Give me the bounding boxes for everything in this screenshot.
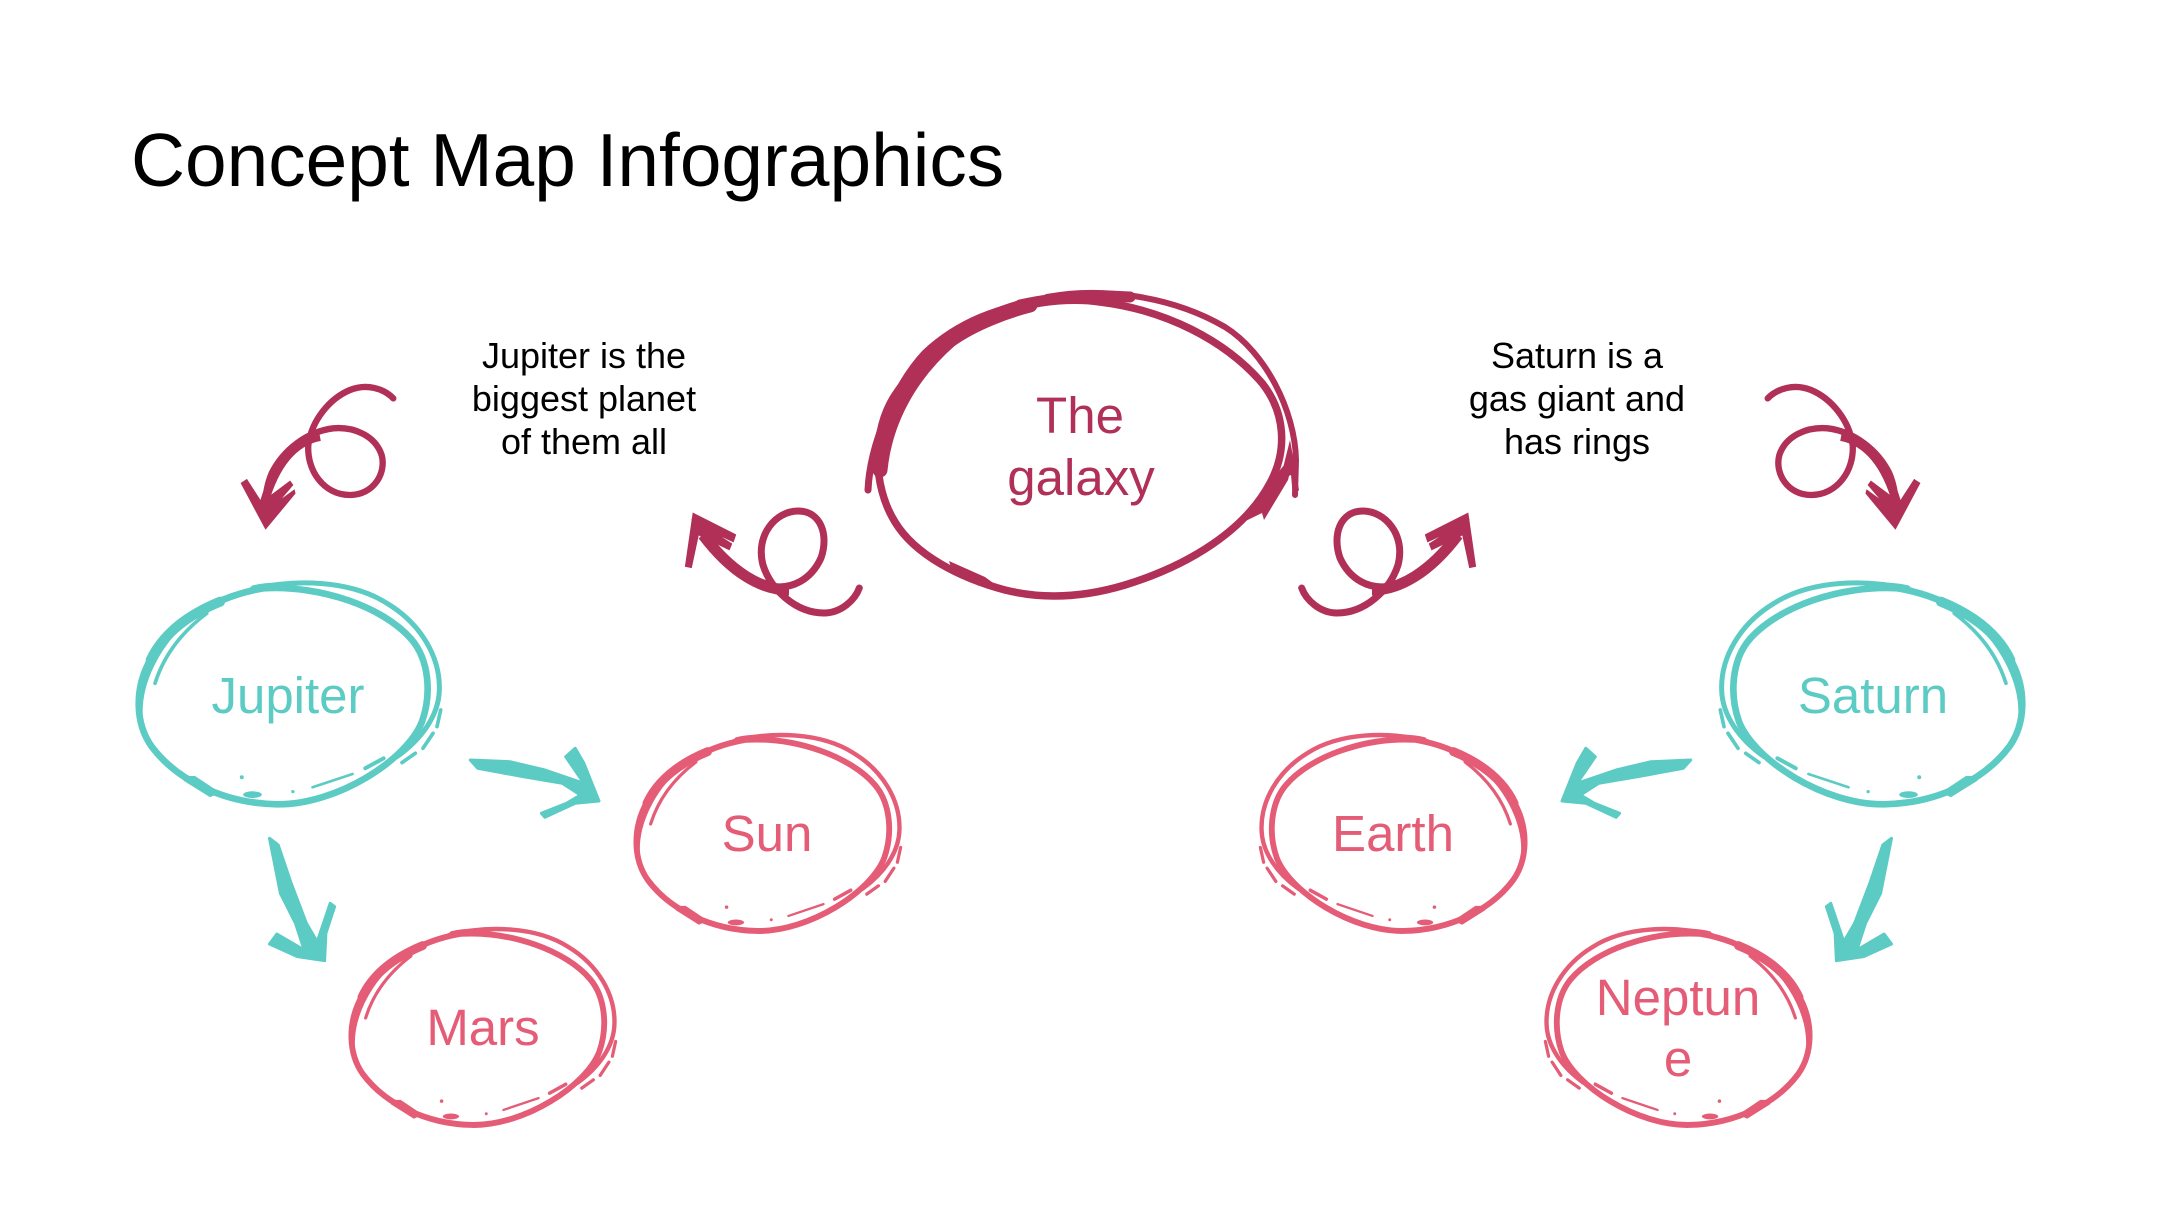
note: Saturn description: Saturn is a [1491, 335, 1664, 376]
node: Neptune: Neptun [1596, 969, 1760, 1026]
note: Saturn description: has rings [1504, 421, 1650, 462]
node: Sun: Sun [722, 805, 812, 862]
arrow: Saturn to Neptune [1826, 838, 1892, 961]
node: Saturn [1720, 583, 2022, 804]
node: Neptune [1545, 929, 1810, 1125]
note: Jupiter description: biggest planet [472, 378, 696, 419]
node: The galaxy [868, 293, 1299, 596]
node: Earth: Earth [1332, 805, 1454, 862]
note: Jupiter description: Jupiter is the [482, 335, 686, 376]
arrow: Saturn to Earth [1562, 748, 1691, 817]
arrow: galaxy to Jupiter (curl) [242, 387, 393, 528]
node: Earth [1260, 735, 1525, 931]
node: Neptune: e [1664, 1030, 1692, 1087]
node: Mars [351, 929, 616, 1125]
arrow: Jupiter to Mars [270, 838, 335, 961]
node: Jupiter [139, 583, 441, 804]
note: Saturn description [1469, 335, 1685, 462]
node: Sun [636, 735, 901, 931]
label: The galaxy: The [1036, 387, 1124, 444]
node: Mars: Mars [426, 999, 540, 1056]
note: Jupiter description [472, 335, 696, 462]
arrow: galaxy to Saturn (curl) [1768, 387, 1919, 528]
label: The galaxy: galaxy [1007, 449, 1155, 506]
arrow: galaxy to Saturn side (small curl) [1302, 511, 1475, 613]
label: The galaxy [1007, 387, 1155, 506]
note: Jupiter description: of them all [501, 421, 667, 462]
title: Concept Map Infographics [131, 118, 1004, 202]
note: Saturn description: gas giant and [1469, 378, 1685, 419]
node: Saturn: Saturn [1798, 667, 1948, 724]
arrow: galaxy to Jupiter side (small curl) [686, 511, 859, 613]
arrow: Jupiter to Sun [470, 748, 599, 817]
node: Jupiter: Jupiter [211, 667, 365, 724]
